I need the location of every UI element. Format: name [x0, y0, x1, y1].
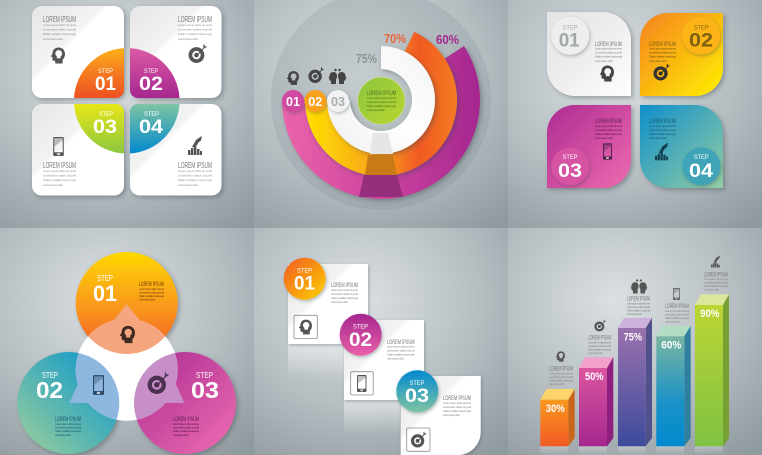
- icon: target: [594, 320, 606, 332]
- icon: phone: [53, 137, 64, 156]
- overlap: right pink with pointer: [134, 353, 184, 420]
- text block: top left: Nullam sodales mauris eget: [43, 32, 76, 36]
- step badge: 01: [551, 17, 589, 55]
- icon: head: [287, 71, 299, 85]
- step badge: 01: 01: [559, 30, 580, 52]
- text block: step 01: Lorem ipsum dolor: [331, 300, 348, 304]
- text block: top left: Lorem ipsum dolor: [43, 37, 63, 41]
- text block: step 02: Lorem ipsum dolor sit amet: [55, 422, 81, 426]
- badge: 02: [304, 90, 326, 112]
- step 03 label: 03: [191, 377, 219, 403]
- icon: two heads: [631, 279, 647, 294]
- panel background: [508, 0, 762, 228]
- icon: target: [653, 64, 670, 80]
- text block: bottom right: Lorem ipsum dolor: [178, 183, 198, 187]
- text block: step 01: Nullam sodales mauris eget: [595, 54, 622, 58]
- card: top left: [32, 6, 124, 98]
- text block: bottom right: Lorem ipsum dolor sit amet: [178, 169, 212, 173]
- icon: phone: [673, 288, 680, 300]
- text block: 30%: LOREM IPSUM: [549, 367, 573, 373]
- bar: 60%: [656, 326, 691, 455]
- bar: 60%: 60%: [661, 340, 681, 352]
- step badge: 03: STEP: [562, 154, 578, 161]
- text block: step 03: consectetur adipis cing elit: [173, 426, 199, 430]
- badge: step 01: [284, 258, 326, 300]
- card: step 03 magenta: [547, 105, 631, 188]
- text block: step 01: LOREM IPSUM: [139, 281, 164, 288]
- step badge: 03: 03: [558, 160, 582, 182]
- text block: 30%: Nullam sodales mauris eget: [549, 378, 573, 382]
- text block: step 02: Lorem ipsum dolor: [649, 59, 667, 63]
- panel background: [254, 228, 508, 455]
- step 03 label: STEP: [196, 371, 213, 380]
- badge: 03: [327, 90, 349, 112]
- text block: 90%: consectetur adipis cing elit: [704, 280, 728, 284]
- text block: step 03: Lorem ipsum dolor: [173, 433, 189, 437]
- text block: top left: consectetur adipis cing elit: [43, 28, 76, 32]
- step badge: 02: [682, 17, 720, 55]
- text block: step 04: Lorem ipsum dolor sit amet: [649, 124, 676, 128]
- text block: 90%: Lorem ipsum dolor sit amet: [704, 277, 728, 281]
- text block: step 02: consectetur adipis cing elit: [649, 50, 676, 54]
- text block: step 01: Nullam sodales mauris eget: [139, 294, 164, 298]
- text block: 60%: [665, 304, 689, 324]
- bar: 75%: 75%: [624, 332, 642, 344]
- step 03 label: 03: [93, 116, 117, 138]
- text block: 60%: consectetur adipis cing elit: [665, 312, 689, 316]
- text block: 75%: [627, 296, 650, 316]
- bar: 30%: 30%: [546, 403, 565, 415]
- text block: 60%: Lorem ipsum dolor sit amet: [665, 309, 689, 313]
- text block: 60%: Lorem ipsum dolor: [665, 320, 680, 324]
- icon: head with bulb: [51, 48, 65, 64]
- text block: step 02: Lorem ipsum dolor sit amet: [387, 344, 415, 348]
- icon: phone: [93, 375, 104, 395]
- text block: step 02: Lorem ipsum dolor: [387, 356, 404, 360]
- text block: 75%: LOREM IPSUM: [627, 296, 650, 302]
- text block: 50%: [588, 336, 611, 355]
- text block: step 03: consectetur adipis cing elit: [595, 128, 622, 132]
- card: step 03: [401, 376, 481, 455]
- quadrant: step 03: [74, 104, 124, 154]
- overlap: top salmon with pointer: [88, 304, 165, 354]
- bar: 30%: [540, 389, 575, 455]
- step 04 label: STEP: [144, 111, 159, 118]
- text block: step 01: Lorem ipsum dolor sit amet: [139, 287, 164, 291]
- icon: target: [189, 44, 207, 63]
- text block: step 03: LOREM IPSUM: [443, 395, 471, 402]
- text block: step 03: consectetur adipis cing elit: [443, 405, 471, 409]
- badge: step 02: [340, 314, 382, 356]
- text block: step 04: LOREM IPSUM: [649, 118, 676, 125]
- step badge: 04: STEP: [694, 154, 709, 161]
- bar: 50%: 50%: [585, 371, 604, 383]
- step 01 label: 01: [95, 73, 116, 95]
- step badge: 04: [682, 147, 720, 185]
- text block: bottom right: LOREM IPSUM: [178, 161, 212, 170]
- text block: 30%: Lorem ipsum dolor: [549, 382, 564, 386]
- step 02 label: 02: [36, 377, 63, 403]
- text block: top left: [43, 15, 76, 41]
- icon: chart with hand: [711, 256, 720, 268]
- icon: chart with hand: [188, 136, 202, 155]
- text block: step 04: consectetur adipis cing elit: [649, 128, 676, 132]
- text block: step 01: [595, 41, 622, 63]
- text block: step 03: [443, 395, 471, 417]
- panel background: [508, 228, 762, 455]
- icon: two heads: [328, 69, 346, 84]
- text block: step 03: Lorem ipsum dolor: [443, 413, 460, 417]
- text block: 50%: Nullam sodales mauris eget: [588, 348, 611, 352]
- text block: bottom left: [43, 161, 76, 187]
- step badge: 01: STEP: [562, 24, 578, 32]
- text block: top right: Nullam sodales mauris eget: [178, 32, 212, 36]
- ring: 70% orange: [305, 32, 457, 176]
- text block: bottom right: Nullam sodales mauris eget: [178, 178, 212, 182]
- text block: 90%: Nullam sodales mauris eget: [704, 284, 728, 288]
- step 01 label: STEP: [98, 68, 113, 75]
- card: top right: [130, 6, 222, 98]
- text block: step 03: [595, 118, 622, 140]
- centre text: LOREM IPSUM: [367, 90, 396, 97]
- badge: step 03: [396, 370, 438, 412]
- text block: 30%: [549, 367, 573, 386]
- text block: step 02: Lorem ipsum dolor: [55, 433, 71, 437]
- text block: step 01: consectetur adipis cing elit: [331, 292, 358, 296]
- percent: 70%: 70%: [384, 31, 406, 46]
- text block: top right: Lorem ipsum dolor sit amet: [178, 23, 212, 27]
- badge: 03: 03: [331, 94, 345, 109]
- text block: step 03: Lorem ipsum dolor: [595, 136, 613, 140]
- step 01 label: 01: [93, 281, 117, 306]
- badge: step 01: 01: [294, 273, 315, 295]
- text block: bottom left: Lorem ipsum dolor sit amet: [43, 169, 76, 173]
- text block: bottom left: consectetur adipis cing elit: [43, 174, 76, 178]
- dark band: magenta ring: [359, 175, 403, 197]
- reflection: card 2: [344, 400, 400, 434]
- card: step 02 orange: [640, 13, 723, 96]
- text block: step 01: LOREM IPSUM: [595, 41, 622, 48]
- ring: 60% magenta: [282, 46, 480, 199]
- card: step 04 teal: [640, 105, 723, 188]
- white centre circle: [76, 319, 178, 421]
- quadrant: step 01: [74, 48, 124, 98]
- panel background: [0, 228, 254, 455]
- text block: 75%: consectetur adipis cing elit: [627, 305, 650, 309]
- step badge: 02: STEP: [694, 24, 709, 32]
- text block: 50%: Lorem ipsum dolor sit amet: [588, 340, 611, 344]
- text block: step 01: consectetur adipis cing elit: [595, 50, 622, 54]
- text block: step 04: Nullam sodales mauris eget: [649, 132, 676, 136]
- text block: 30%: consectetur adipis cing elit: [549, 375, 573, 379]
- text block: 60%: LOREM IPSUM: [665, 304, 689, 310]
- ring: 75% white: [327, 46, 435, 154]
- step 03 label: STEP: [99, 111, 113, 118]
- step badge: 04: 04: [689, 160, 713, 182]
- card: step 02: [344, 320, 424, 400]
- text block: step 03: Lorem ipsum dolor sit amet: [173, 422, 199, 426]
- text block: bottom right: [178, 161, 212, 187]
- badge: step 03: STEP: [410, 380, 424, 387]
- text block: top left: Lorem ipsum dolor sit amet: [43, 23, 76, 27]
- bar: 90%: 90%: [700, 308, 719, 320]
- text block: 75%: Lorem ipsum dolor: [627, 312, 642, 316]
- circle: step 02: [17, 352, 119, 454]
- text block: step 01: Lorem ipsum dolor: [139, 298, 155, 302]
- text block: step 03: Nullam sodales mauris eget: [173, 429, 199, 433]
- icon box: target: [407, 428, 430, 451]
- text block: step 01: [331, 282, 358, 304]
- text block: bottom left: LOREM IPSUM: [43, 161, 76, 170]
- text block: step 01: Lorem ipsum dolor sit amet: [331, 288, 358, 292]
- bar: 90%: [695, 294, 729, 455]
- panel: four leaf cards: [508, 0, 762, 228]
- centre text: Nullam sodales mauris eget: [367, 104, 396, 108]
- icon: target: [148, 372, 169, 394]
- text block: step 03: Lorem ipsum dolor sit amet: [443, 401, 471, 405]
- icon: phone: [603, 143, 612, 160]
- text block: top right: LOREM IPSUM: [178, 15, 212, 24]
- percent: 60%: 60%: [436, 32, 459, 47]
- text block: step 02: Nullam sodales mauris eget: [649, 54, 676, 58]
- icon box: head: [294, 315, 317, 339]
- text block: bottom left: Nullam sodales mauris eget: [43, 178, 76, 182]
- text block: 90%: [704, 272, 728, 292]
- text block: top right: [178, 15, 212, 41]
- text block: step 01: LOREM IPSUM: [331, 282, 358, 289]
- text block: top right: consectetur adipis cing elit: [178, 28, 212, 32]
- icon: head: [556, 351, 565, 362]
- icon: chart with hand: [655, 143, 668, 160]
- text block: 90%: LOREM IPSUM: [704, 272, 728, 278]
- badge: step 02: STEP: [353, 324, 368, 330]
- bar: 50%: [579, 357, 613, 455]
- step badge: 02: 02: [689, 30, 713, 52]
- text block: step 02: [649, 41, 676, 63]
- centre circle: [358, 77, 405, 124]
- text block: step 04: [649, 118, 676, 140]
- icon: head: [600, 66, 614, 82]
- overlap: left blue with pointer: [69, 353, 120, 420]
- text block: step 02: LOREM IPSUM: [387, 339, 414, 346]
- badge: step 01: STEP: [297, 268, 312, 275]
- badge: 01: [282, 90, 304, 112]
- text block: step 02: Lorem ipsum dolor sit amet: [649, 46, 676, 50]
- centre text: Lorem ipsum dolor sit amet: [367, 96, 396, 100]
- percent: 75%: 75%: [356, 51, 377, 66]
- card: bottom right: [130, 104, 222, 196]
- text block: step 02: [55, 416, 81, 437]
- step badge: 03: [551, 147, 589, 185]
- text block: step 02: LOREM IPSUM: [55, 416, 81, 423]
- text block: step 04: Lorem ipsum dolor: [649, 136, 667, 140]
- quadrant: step 02: [130, 48, 180, 98]
- step 02 label: STEP: [144, 68, 158, 75]
- dark band: orange ring: [365, 155, 397, 175]
- text block: step 02: consectetur adipis cing elit: [55, 426, 81, 430]
- step 02 label: 02: [139, 73, 163, 95]
- large backdrop circle: [271, 0, 491, 210]
- bar: 75%: [618, 318, 652, 455]
- text block: 50%: LOREM IPSUM: [588, 336, 611, 342]
- text block: 75%: Lorem ipsum dolor sit amet: [627, 302, 650, 306]
- card: step 01: [288, 264, 368, 344]
- text block: 90%: Lorem ipsum dolor: [704, 288, 719, 292]
- text block: step 02: LOREM IPSUM: [649, 41, 676, 48]
- text block: top right: Lorem ipsum dolor: [178, 37, 198, 41]
- text block: step 03: LOREM IPSUM: [595, 118, 622, 125]
- text block: step 03: Nullam sodales mauris eget: [595, 132, 622, 136]
- text block: step 01: consectetur adipis cing elit: [139, 290, 164, 294]
- panel: three overlapping circles: [0, 228, 254, 455]
- text block: bottom left: Lorem ipsum dolor: [43, 183, 63, 187]
- text block: step 03: Lorem ipsum dolor sit amet: [595, 124, 622, 128]
- badge: step 03: 03: [405, 385, 429, 407]
- text block: step 01: Lorem ipsum dolor sit amet: [595, 46, 622, 50]
- text block: top left: LOREM IPSUM: [43, 15, 76, 24]
- text block: 60%: Nullam sodales mauris eget: [665, 316, 689, 320]
- step 02 label: STEP: [42, 371, 58, 380]
- text block: 50%: Lorem ipsum dolor: [588, 351, 603, 355]
- text block: step 01: Nullam sodales mauris eget: [331, 296, 358, 300]
- badge: 02: 02: [308, 94, 322, 109]
- text block: step 01: [139, 281, 164, 302]
- text block: step 03: [173, 416, 199, 437]
- light band: white ring: [370, 133, 393, 154]
- panel: 3D bar chart: [508, 228, 762, 455]
- step 01 label: STEP: [97, 274, 113, 283]
- icon box: phone: [351, 372, 373, 395]
- badge: step 02: 02: [349, 329, 372, 351]
- centre text: consectetur adipis cing elit: [367, 100, 396, 104]
- centre text: Lorem ipsum dolor: [367, 108, 385, 112]
- text block: step 03: LOREM IPSUM: [173, 416, 199, 423]
- centre text: [367, 90, 396, 112]
- quadrant: step 04: [130, 104, 180, 154]
- badge: 01: 01: [286, 94, 300, 109]
- text block: 75%: Nullam sodales mauris eget: [627, 308, 650, 312]
- circle: step 03: [134, 352, 236, 454]
- text block: step 01: Lorem ipsum dolor: [595, 59, 613, 63]
- text block: step 03: Nullam sodales mauris eget: [443, 409, 471, 413]
- panel: four-step rounded cards: [0, 0, 254, 228]
- text block: 50%: consectetur adipis cing elit: [588, 344, 611, 348]
- panel background: [254, 0, 508, 228]
- text block: step 02: Nullam sodales mauris eget: [55, 429, 81, 433]
- text block: step 02: consectetur adipis cing elit: [387, 348, 415, 352]
- panel: concentric progress rings: [254, 0, 508, 228]
- icon: head: [120, 326, 135, 343]
- panel: staircase cards: [254, 228, 508, 455]
- text block: step 02: [387, 339, 415, 360]
- card: step 01 white: [547, 12, 631, 96]
- text block: 30%: Lorem ipsum dolor sit amet: [549, 372, 573, 376]
- reflection: card 1: [288, 344, 344, 378]
- text block: step 02: Nullam sodales mauris eget: [387, 352, 415, 356]
- circle: step 01: [76, 252, 178, 354]
- step 04 label: 04: [139, 116, 163, 138]
- card: bottom left: [32, 104, 124, 196]
- icon: target: [308, 67, 324, 83]
- panel background: [0, 0, 254, 228]
- text block: bottom right: consectetur adipis cing elit: [178, 174, 212, 178]
